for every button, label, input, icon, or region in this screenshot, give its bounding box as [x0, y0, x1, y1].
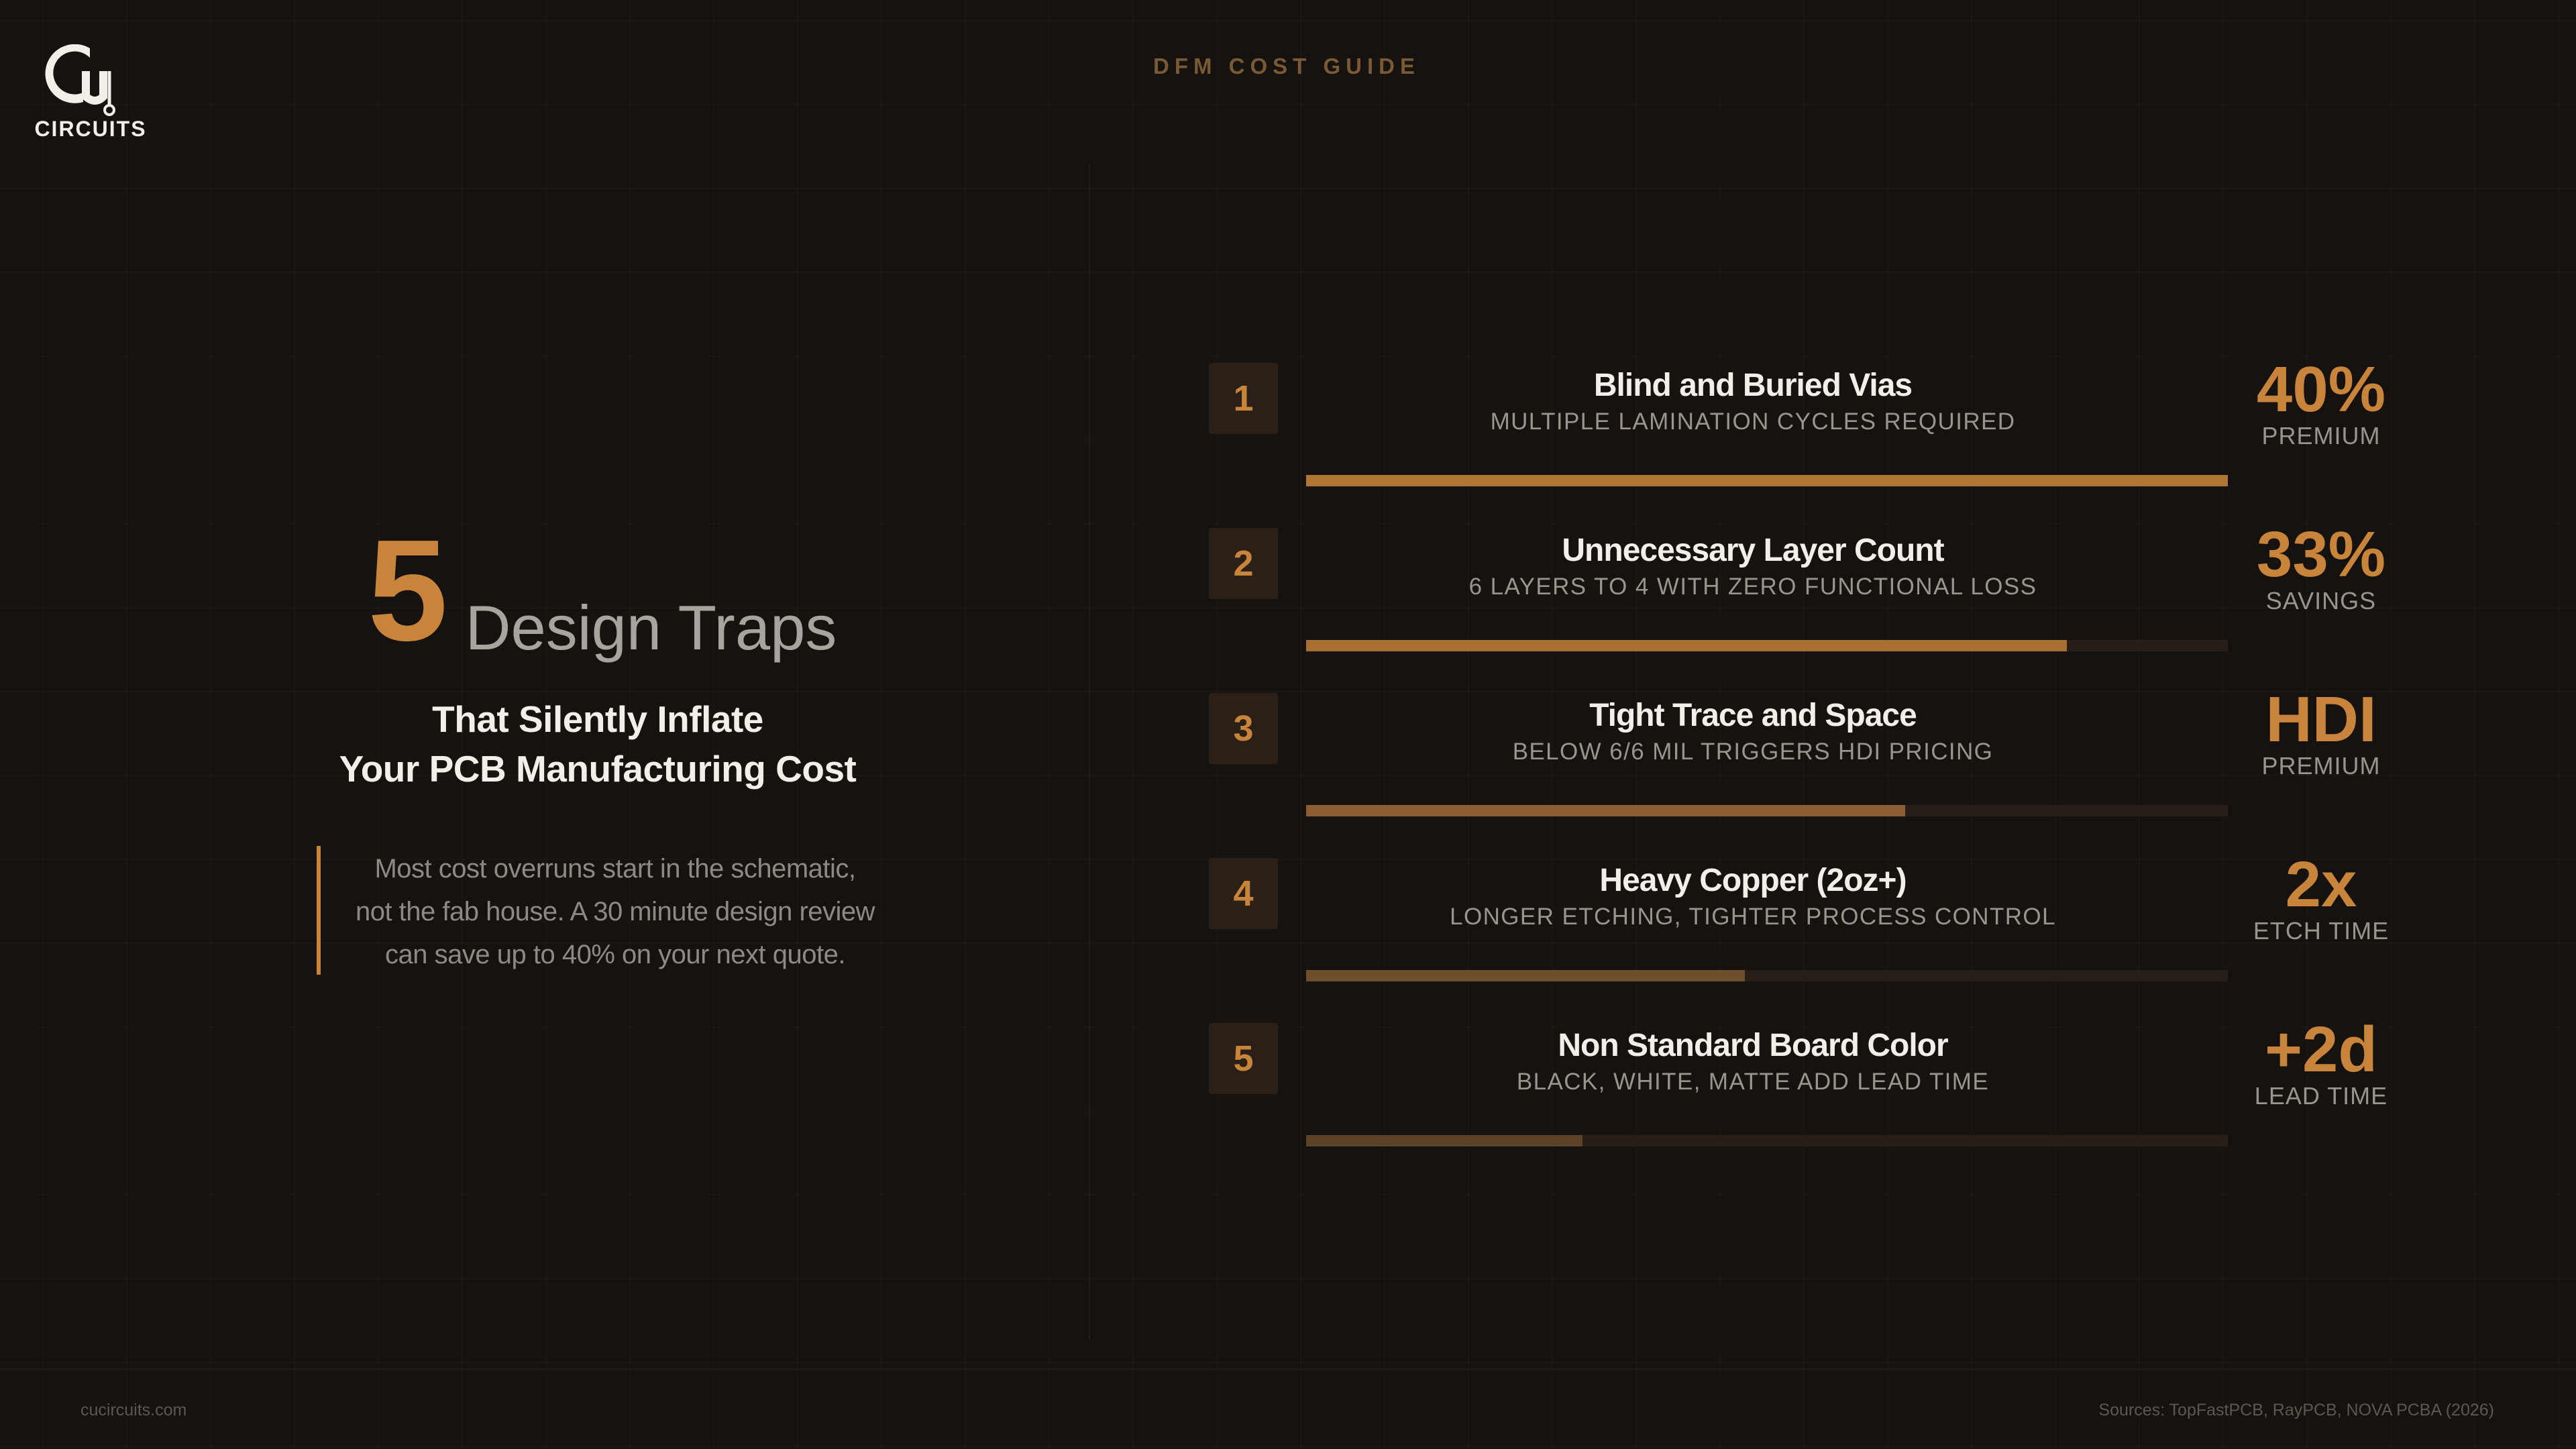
subheading: That Silently Inflate — [432, 698, 763, 740]
row 2: 2 — [1233, 543, 1254, 584]
row 5 — [1209, 1014, 2387, 1146]
row 1: 40% — [2257, 354, 2385, 425]
row 2: 33% — [2257, 519, 2385, 590]
row 4 — [1209, 849, 2389, 981]
subheading: Your PCB Manufacturing Cost — [339, 748, 856, 790]
row 1: MULTIPLE LAMINATION CYCLES REQUIRED — [1491, 409, 2015, 435]
row 3: 3 — [1233, 708, 1254, 749]
logo — [34, 44, 147, 141]
row 2 — [1209, 519, 2385, 651]
row 2: 6 LAYERS TO 4 WITH ZERO FUNCTIONAL LOSS — [1469, 574, 2037, 600]
row 3: BELOW 6/6 MIL TRIGGERS HDI PRICING — [1513, 739, 1993, 765]
footer: sources: Sources: TopFastPCB, RayPCB, NOVA PCBA (2026) — [2098, 1401, 2494, 1419]
row 3: Tight Trace and Space — [1589, 698, 1917, 733]
row 1: Blind and Buried Vias — [1594, 368, 1912, 403]
row 1: 1 — [1233, 378, 1254, 419]
heading: 5 Design Traps: 5 Design Traps — [368, 509, 837, 671]
row 5: BLACK, WHITE, MATTE ADD LEAD TIME — [1517, 1069, 1989, 1095]
row 5: LEAD TIME — [2255, 1082, 2387, 1110]
quote block: can save up to 40% on your next quote. — [385, 940, 845, 969]
row 4: 2x — [2286, 849, 2357, 920]
row 2: SAVINGS — [2266, 587, 2376, 614]
row 5: +2d — [2265, 1014, 2377, 1085]
row 4: 4 — [1233, 873, 1254, 914]
quote block: not the fab house. A 30 minute design review — [356, 897, 875, 926]
row 3 — [1209, 684, 2380, 816]
row 4: Heavy Copper (2oz+) — [1599, 863, 1907, 898]
row 2: Unnecessary Layer Count — [1562, 533, 1944, 568]
row 3: PREMIUM — [2262, 752, 2380, 780]
subheading — [339, 698, 856, 790]
row 4: ETCH TIME — [2253, 917, 2389, 945]
quote block: Most cost overruns start in the schematic, — [374, 854, 856, 883]
row 1: PREMIUM — [2262, 422, 2380, 449]
row 5: 5 — [1233, 1038, 1254, 1079]
row 5: Non Standard Board Color — [1558, 1028, 1948, 1063]
header label: DFM COST GUIDE — [1153, 54, 1420, 78]
row 4: LONGER ETCHING, TIGHTER PROCESS CONTROL — [1450, 904, 2056, 930]
row 1 — [1209, 354, 2385, 486]
footer: website: cucircuits.com — [80, 1401, 186, 1419]
quote block — [317, 846, 875, 975]
logo: CIRCUITS — [34, 117, 147, 141]
row 3: HDI — [2265, 684, 2377, 755]
